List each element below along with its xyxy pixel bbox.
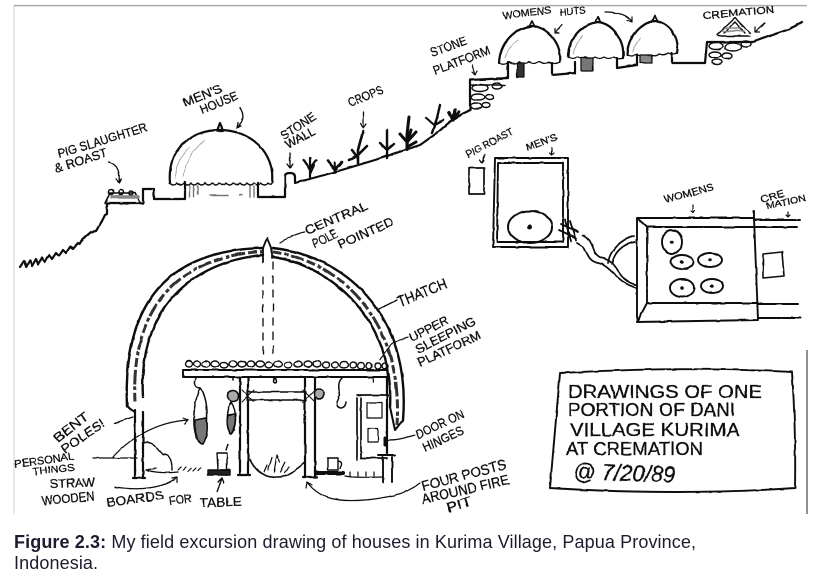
label: men's house: HOUSE (198, 89, 240, 117)
label: womens huts (502, 5, 586, 22)
label: upper sleeping platform: PLATFORM (415, 328, 483, 370)
caption: Indonesia. (14, 553, 98, 573)
arrow: crops (360, 112, 366, 128)
label: four posts around fire pit: FOUR POSTS (420, 456, 508, 494)
straw floor (146, 467, 383, 477)
leader: thatch (377, 300, 397, 310)
label: crops: CROPS (346, 83, 385, 110)
label: wooden boards for table: BOARDS (105, 488, 165, 510)
door on hinges (357, 395, 388, 460)
box outline (550, 369, 795, 492)
leaders: personal things (93, 418, 188, 458)
cremation pyre and stones (709, 18, 751, 64)
label: cremation plan: CRE (760, 188, 786, 206)
label: wooden boards for table: TABLE (200, 495, 242, 510)
leader: central pole (280, 232, 305, 243)
leader: upper platform (380, 337, 408, 360)
label: stone platform: STONE (428, 34, 469, 60)
panel: plan of men's compound (469, 158, 578, 247)
box text: VILLAGE KURIMA (570, 420, 740, 440)
label: central pole pointed: POINTED (336, 215, 396, 252)
women's compound walls (637, 211, 758, 322)
cremation area rails (754, 220, 800, 318)
arrow: wooden boards (217, 478, 224, 492)
label: personal things: PERSONAL (14, 451, 75, 471)
stone platform (470, 83, 505, 109)
box text: DRAWINGS OF ONE (568, 382, 762, 402)
label: cremation: CREMATION (702, 5, 775, 22)
label: bent poles: BENT (51, 409, 91, 445)
label: personal things: THINGS (32, 463, 75, 478)
label: central pole pointed: CENTRAL (303, 199, 370, 238)
table with cup (315, 458, 343, 473)
label: pig slaughter and roast: & ROAST (53, 145, 110, 176)
box text: PORTION OF DANI (568, 400, 735, 420)
box text: @ 7/20/89 (573, 458, 676, 488)
panel: path between compounds (577, 235, 637, 288)
arrow: men's plan (550, 148, 554, 155)
label: upper sleeping platform: UPPER (407, 313, 451, 345)
hanging net bags (194, 377, 373, 444)
box text (566, 382, 762, 488)
caption: Figure 2.3: My field excursion drawing of houses in Kurima Village, Papua Province, (14, 532, 696, 552)
label: cremation plan (760, 188, 807, 211)
women's hut circles (662, 230, 723, 297)
arrow: straw (115, 477, 177, 489)
label: bent poles: POLES! (58, 415, 108, 456)
women's hut 2 (568, 17, 623, 71)
box text: AT CREMATION (566, 439, 703, 459)
label: door on hinges: DOOR ON (413, 407, 466, 442)
pig roast pit (105, 190, 140, 203)
label: wooden boards for table: FOR (169, 491, 192, 508)
arrow: pig roast plan (480, 155, 485, 163)
label: straw: STRAW (50, 475, 95, 491)
stool (378, 455, 395, 482)
leader: bent poles (115, 417, 133, 423)
label: pig roast plan: PIG ROAST (464, 127, 515, 161)
label: four posts around fire pit: AROUND FIRE (420, 471, 510, 507)
personal things mound (144, 442, 172, 470)
label: womens huts: WOMENS (502, 5, 552, 22)
sleeping platform logs (186, 361, 388, 369)
men's house (170, 123, 272, 197)
panel: hillside cross-section (20, 16, 802, 267)
arrow: four posts (306, 482, 420, 501)
cremation rectangle (763, 252, 784, 278)
label: stone wall: STONE (278, 110, 318, 143)
label: cremation plan: MATION (765, 193, 807, 211)
arrow: cremation plan (786, 212, 790, 217)
label: womens huts: HUTS (559, 5, 586, 19)
label: wooden boards for table (41, 488, 242, 510)
pig roast rectangle (469, 168, 484, 194)
arrows: womens huts (555, 12, 632, 33)
arrow: pig roast (109, 162, 121, 183)
panel: cutaway of house (127, 238, 404, 482)
ground line (20, 22, 802, 267)
crops (304, 105, 459, 177)
label: bent poles (51, 409, 108, 456)
label: central pole pointed (303, 199, 396, 252)
women's hut 1 (499, 21, 560, 77)
leader: door (388, 435, 415, 440)
platform beam (183, 370, 388, 377)
label: four posts around fire pit: PIT (444, 492, 474, 516)
label: stone platform: PLATFORM (431, 43, 492, 78)
arrow: stone wall (287, 153, 293, 168)
men's compound walls (493, 158, 568, 247)
label: men's house (181, 81, 240, 117)
label: pig slaughter and roast: PIG SLAUGHTER (56, 120, 149, 161)
label: womens plan: WOMENS (663, 182, 715, 206)
label: door on hinges (413, 407, 466, 455)
gate hatch (559, 220, 578, 241)
arrow: men's house (237, 108, 243, 128)
fire pit and plant (250, 455, 305, 477)
central pole tip and dashed pole (263, 238, 273, 357)
label: door on hinges: HINGES (420, 423, 466, 455)
label: central pole pointed: POLE (310, 227, 340, 251)
panel: plan of women's compound (637, 211, 800, 322)
label: upper sleeping platform: SLEEPING (413, 314, 478, 357)
label: stone wall: WALL (283, 124, 318, 152)
label: men's house: MEN'S (181, 81, 224, 110)
arrow: stone platform (472, 65, 477, 75)
thatch roof (127, 248, 404, 430)
table with pot (208, 444, 230, 475)
label: thatch: THATCH (395, 275, 450, 311)
label: four posts around fire pit (420, 456, 510, 516)
caption (14, 532, 696, 573)
label: men's plan: MEN'S (524, 132, 559, 154)
label: upper sleeping platform (407, 313, 483, 370)
women's hut 3 (627, 16, 678, 63)
label: wooden boards for table: WOODEN (41, 489, 95, 508)
arrow: womens plan (691, 205, 695, 213)
panel: title box (550, 369, 795, 492)
men's house circle (508, 211, 552, 243)
label: pig slaughter and roast (53, 120, 149, 176)
posts and cross bar (133, 377, 387, 478)
arrow: cremation (755, 23, 765, 32)
